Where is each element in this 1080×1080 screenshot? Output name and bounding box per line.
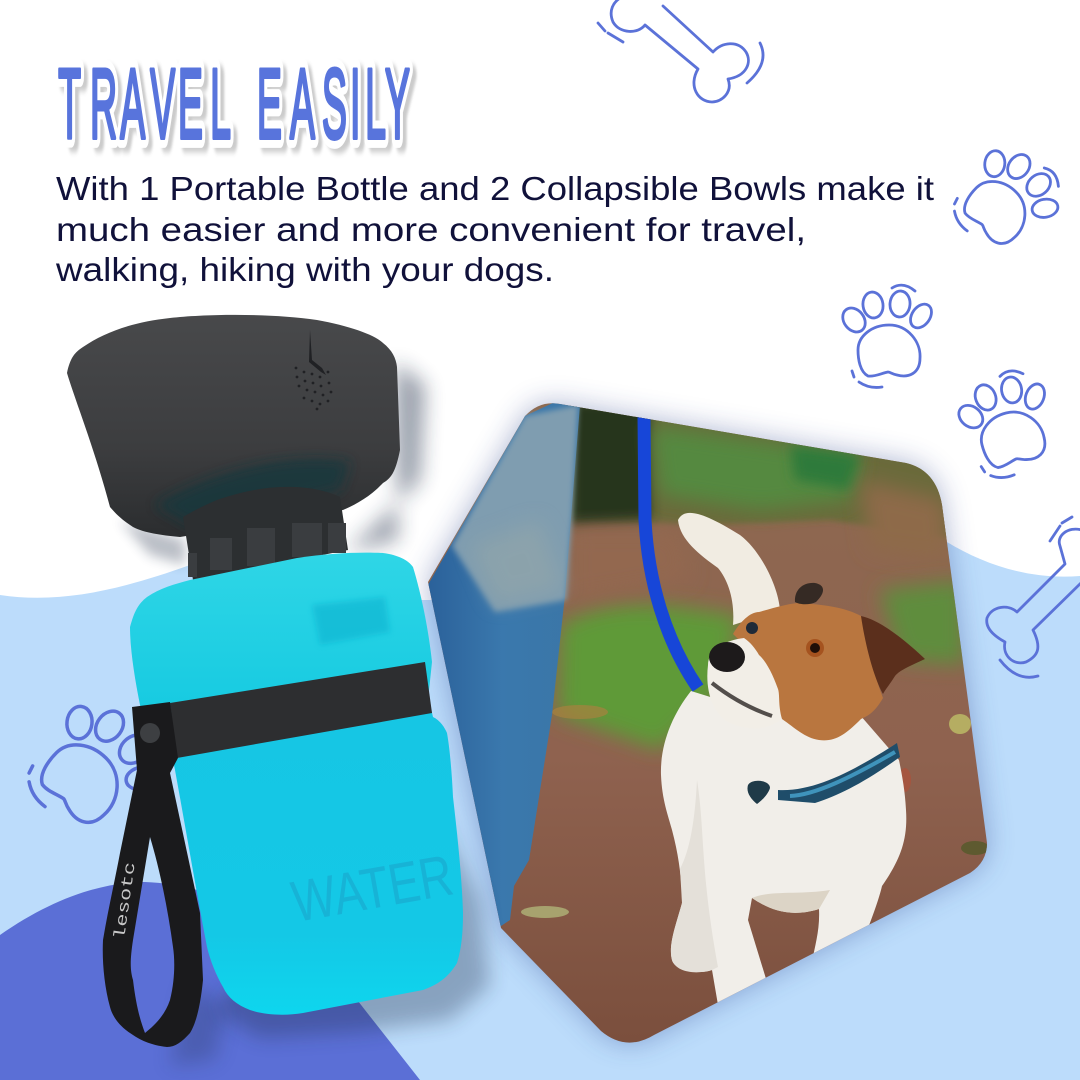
WATER embossed text: WATER [287,843,458,935]
foliage background [570,406,946,538]
ground [420,395,1000,1055]
icon: paw middle [838,285,936,387]
bottle neck [183,487,348,580]
dog tag [747,781,770,804]
jeans leg [425,402,580,926]
strap loop [103,702,203,1047]
dog tail [678,513,780,625]
icon: paw right [947,363,1067,486]
dog [661,513,925,1005]
strap band [170,662,432,758]
photo panel: dog on a walk [420,395,1000,1055]
grass patch [558,605,740,750]
strap brand text: lesotc [111,861,140,941]
photo shadow [428,403,987,1043]
product: water bottle [67,315,463,1047]
icon: bone top [598,0,763,102]
dog head [733,603,883,740]
dog shading [671,780,718,972]
icon: bone right [987,517,1080,677]
cap perforations [295,330,332,410]
dark blue blob [0,882,420,1080]
description text: With 1 Portable Bottle and 2 Collapsible Bowls make it [56,170,934,207]
dog ear right [861,616,925,694]
bottle cap bowl [67,315,400,537]
dog ear left [795,583,823,604]
dog collar [778,743,900,803]
bottle upper body [130,553,432,740]
dog nose [709,642,745,672]
title: TRAVEL EASILY [58,48,410,159]
title: TRAVEL EASILY [58,48,410,159]
icon: paw left [6,678,183,855]
title: TRAVEL EASILY [62,53,414,164]
bottle shadow [120,362,490,1066]
cap teal reflection [155,459,350,525]
icon: paw top right [936,128,1077,269]
bottle lower body [168,695,463,1015]
jeans faded patch [452,405,578,612]
dog body [661,691,906,1005]
description text: much easier and more convenient for travel, [56,211,806,248]
leash [644,416,698,688]
description text: walking, hiking with your dogs. [55,251,554,288]
light blue wave [0,542,1080,1080]
leaves on ground [521,705,989,918]
dog mouth line [712,683,772,716]
dog eyes [806,639,824,657]
description text [55,170,934,288]
dog muzzle white [707,638,782,728]
